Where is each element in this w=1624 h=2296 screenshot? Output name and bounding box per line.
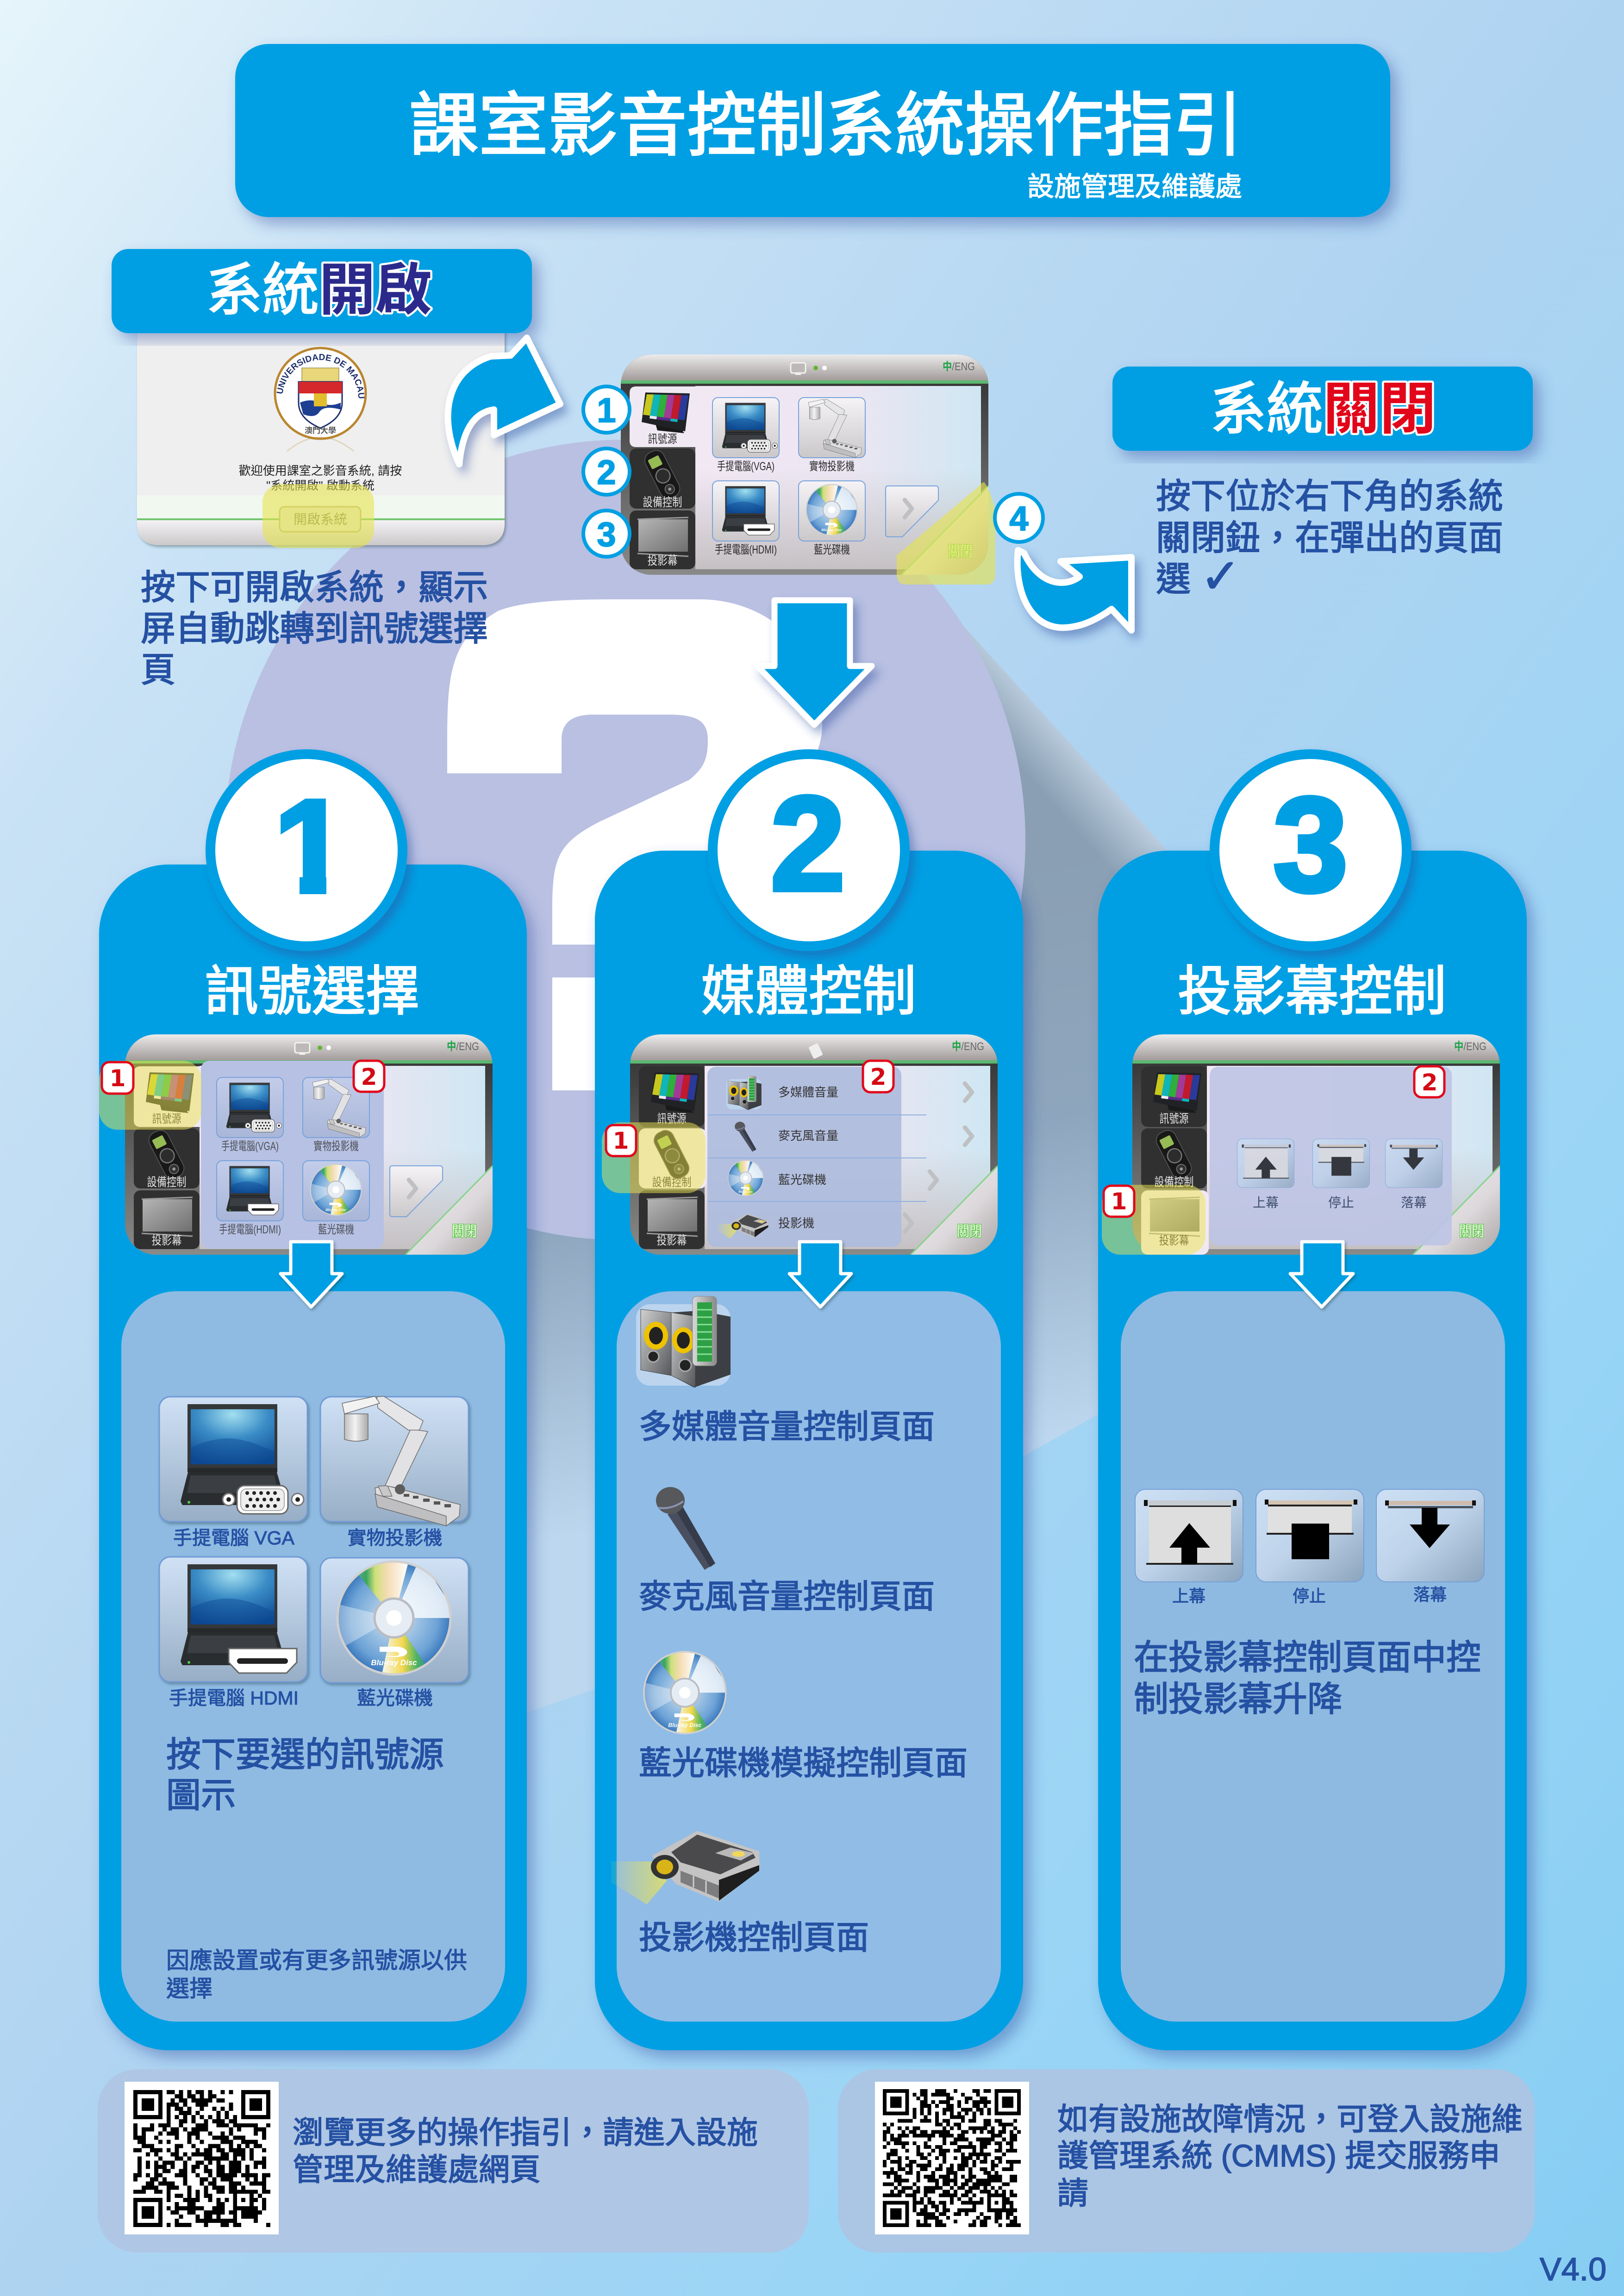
language switch: 中/ENG — [943, 361, 975, 373]
marker 2: 2 — [597, 453, 616, 492]
note text — [166, 1948, 467, 2002]
arrow down — [789, 1242, 851, 1307]
text: system off instructions: 選 — [1156, 560, 1191, 598]
screen: media control: 設備控制 — [652, 1176, 692, 1189]
instruction text — [1134, 1638, 1481, 1718]
control: screen down — [1376, 1489, 1484, 1604]
welcome text: "系統開啟" 啟動系統 — [266, 479, 375, 492]
screen: projection screen control: 落幕 — [1401, 1195, 1427, 1210]
QR code — [875, 2082, 1029, 2234]
screen: projection screen control — [1102, 1034, 1500, 1255]
badge 1 — [102, 1062, 133, 1094]
inner panel — [1121, 1291, 1505, 2022]
screen: signal selection: 手提電腦(VGA) — [221, 1140, 279, 1153]
instruction text: 制投影幕升降 — [1134, 1680, 1342, 1718]
welcome text: 歡迎使用課室之影音系統, 請按 — [239, 464, 402, 478]
version label: V4.0 — [1540, 2251, 1606, 2287]
source tile: HDMI laptop — [712, 481, 779, 556]
screen: projection screen control: 投影幕 — [1159, 1234, 1189, 1247]
source tile: HDMI laptop — [159, 1557, 307, 1709]
item: projector control — [611, 1831, 869, 1956]
icon: university crest — [275, 348, 366, 451]
badge 2: 2 — [361, 1064, 377, 1090]
close button label: 關閉 — [948, 543, 973, 560]
item: blu-ray control: 藍光碟機模擬控制頁面 — [639, 1745, 968, 1782]
long shadow behind the circle — [417, 622, 1389, 1712]
text: system on instructions: 屏自動跳轉到訊號選擇 — [141, 609, 488, 648]
source tile: VGA laptop — [159, 1397, 307, 1549]
big circle — [225, 440, 1025, 1240]
heading: 媒體控制 — [701, 961, 916, 1021]
screen: projection screen control: 關閉 — [1459, 1223, 1484, 1239]
badge 2 — [1414, 1066, 1444, 1097]
icon: university crest: UNIVERSIDADE DE MACAU — [275, 353, 366, 399]
active tab: signal source: 訊號源 — [648, 433, 677, 446]
panel 2: media control — [595, 749, 1023, 2050]
source tile: blu-ray — [799, 481, 865, 556]
source tile: VGA laptop — [712, 398, 779, 473]
QR description: 如有設施故障情況，可登入設施維 — [1057, 2102, 1523, 2137]
text: system on instructions: 頁 — [141, 650, 175, 689]
source tile: document camera — [320, 1396, 468, 1549]
badge 1: 1 — [613, 1127, 629, 1154]
title banner — [235, 44, 1390, 217]
badge 1 — [1104, 1186, 1134, 1217]
screen: projection screen control: 停止 — [1328, 1195, 1354, 1210]
active tab: signal source — [630, 386, 697, 447]
badge 2 — [354, 1061, 384, 1092]
inner panel — [617, 1291, 1001, 2022]
badge 1 — [606, 1125, 636, 1156]
source tile: HDMI laptop: 手提電腦 HDMI — [169, 1687, 299, 1709]
next page button — [886, 486, 938, 537]
welcome text — [239, 464, 402, 492]
screen: media control: 藍光碟機 — [778, 1173, 826, 1187]
screen: signal selection — [99, 1034, 493, 1255]
control: screen stop: 停止 — [1293, 1587, 1326, 1605]
item: projector control: 投影機控制頁面 — [639, 1920, 869, 1956]
item: multimedia volume: 多媒體音量控制頁面 — [639, 1409, 935, 1445]
screen: media control: 投影幕 — [656, 1233, 687, 1247]
source tile: blu-ray — [320, 1558, 468, 1709]
panel 1: signal selection — [99, 749, 527, 2050]
source tile: VGA laptop: 手提電腦 VGA — [173, 1527, 295, 1549]
step number 2: 2 — [770, 769, 845, 919]
source tile: blu-ray: 藍光碟機 — [357, 1687, 433, 1709]
item: multimedia volume — [636, 1296, 935, 1445]
badge 2: 2 — [870, 1064, 886, 1090]
step number 2 — [708, 749, 910, 951]
badge 1: 1 — [110, 1065, 125, 1092]
QR description: 瀏覽更多的操作指引，請進入設施 — [293, 2116, 758, 2150]
QR code — [125, 2082, 279, 2234]
tab: device control: 設備控制 — [643, 495, 682, 509]
icon: monitor and page dots — [791, 363, 827, 375]
instruction text: 圖示 — [166, 1776, 236, 1815]
heading: system on: 系統開啟 — [206, 259, 432, 322]
screen: signal selection: 藍光碟機 — [318, 1223, 354, 1236]
QR description: 管理及維護處網頁 — [293, 2153, 541, 2187]
QR description — [293, 2116, 758, 2187]
screen: media control: 訊號源 — [657, 1112, 686, 1126]
inner panel — [121, 1291, 505, 2022]
control: screen stop — [1256, 1489, 1364, 1605]
instruction text: 按下要選的訊號源 — [166, 1735, 444, 1774]
panel: CMMS QR — [838, 2069, 1535, 2252]
icon: university crest: 澳門大學 — [305, 426, 336, 435]
text: system off instructions: 按下位於右下角的系統 — [1156, 477, 1503, 516]
step number 1 — [206, 749, 407, 951]
start button with highlight — [262, 484, 374, 548]
arrow down — [281, 1242, 342, 1307]
screen: projection screen control: 上幕 — [1253, 1195, 1279, 1210]
screen: signal selection: 設備控制 — [147, 1175, 186, 1189]
marker 1: 1 — [597, 391, 616, 429]
control: screen up — [1135, 1489, 1243, 1605]
marker 2 — [583, 448, 630, 495]
tab: device control — [642, 448, 683, 509]
arrow down — [1290, 1242, 1353, 1307]
control: screen up: 上幕 — [1172, 1587, 1206, 1605]
highlight: close corner — [897, 482, 995, 585]
marker 4 — [995, 494, 1043, 542]
instruction text: 在投影幕控制頁面中控 — [1134, 1638, 1481, 1677]
badge 2 — [863, 1061, 893, 1092]
note text: 因應設置或有更多訊號源以供 — [166, 1948, 467, 1973]
step number 3: 3 — [1273, 770, 1348, 920]
item: blu-ray control — [639, 1649, 968, 1782]
control: screen down: 落幕 — [1413, 1585, 1447, 1604]
step markers on main screen — [583, 386, 1043, 557]
source tile: document camera: 實物投影機 — [347, 1527, 443, 1549]
marker 3 — [583, 510, 630, 557]
screen: media control: 麥克風音量 — [778, 1129, 838, 1143]
source tile: blu-ray: 藍光碟機 — [814, 543, 850, 556]
main title: 課室影音控制系統操作指引 — [409, 87, 1243, 164]
heading: system off: 系統關閉 — [1210, 378, 1436, 441]
panel: system start screen — [137, 324, 505, 548]
screen: signal selection: 關閉 — [452, 1223, 477, 1239]
panel: more guides QR — [98, 2069, 809, 2252]
heading: system on — [112, 249, 532, 333]
marker 1 — [583, 386, 630, 433]
arrow: curved from close button — [1018, 550, 1131, 630]
text: system on instructions — [141, 568, 488, 689]
item: microphone volume — [639, 1487, 935, 1615]
marker 3: 3 — [597, 515, 616, 554]
screen: signal selection: 中/ENG — [447, 1040, 479, 1053]
tab: projection screen — [637, 517, 688, 567]
QR description — [1057, 2102, 1523, 2211]
heading: system off — [1112, 367, 1533, 451]
big question mark — [447, 599, 822, 1090]
item: microphone volume: 麥克風音量控制頁面 — [639, 1579, 935, 1615]
text: system off instructions: ✓ — [1200, 548, 1241, 604]
source tile: VGA laptop: 手提電腦(VGA) — [717, 460, 775, 473]
screen: signal selection: 手提電腦(HDMI) — [219, 1223, 281, 1236]
text: system off instructions — [1156, 477, 1503, 604]
source tile: document camera — [799, 398, 865, 473]
QR description: 請 — [1057, 2176, 1088, 2211]
text: system off instructions: 關閉鈕，在彈出的頁面 — [1156, 518, 1503, 557]
badge 2: 2 — [1422, 1069, 1437, 1096]
screen: media control: 中/ENG — [952, 1040, 984, 1053]
screen: media control — [602, 1034, 998, 1255]
department name: 設施管理及維護處 — [1027, 172, 1242, 202]
marker 4: 4 — [1009, 499, 1029, 538]
instruction text — [166, 1735, 444, 1815]
screen: signal selection: 訊號源 — [152, 1113, 181, 1126]
source tile: HDMI laptop: 手提電腦(HDMI) — [715, 543, 777, 556]
screen: media control: 多媒體音量 — [778, 1085, 838, 1099]
source tile: document camera: 實物投影機 — [809, 460, 855, 473]
note text: 選擇 — [166, 1976, 212, 2002]
screen: projection screen control: 設備控制 — [1155, 1175, 1193, 1189]
screen: media control: 關閉 — [957, 1223, 982, 1239]
screen: projection screen control: 訊號源 — [1159, 1112, 1189, 1126]
heading: 投影幕控制 — [1178, 961, 1446, 1021]
tab: projection screen: 投影幕 — [647, 554, 678, 567]
step number 1: 1 — [274, 772, 349, 922]
QR description: 護管理系統 (CMMS) 提交服務申 — [1057, 2139, 1500, 2173]
badge 1: 1 — [1111, 1188, 1127, 1215]
screen: signal selection: 投影幕 — [152, 1233, 181, 1247]
arrow: big down arrow — [757, 600, 872, 725]
screen: signal selection: 實物投影機 — [313, 1140, 359, 1153]
arrow: curved from start to source page — [448, 338, 560, 464]
screen: media control: 投影機 — [778, 1216, 814, 1230]
step number 3 — [1210, 749, 1412, 951]
heading: 訊號選擇 — [205, 961, 419, 1021]
panel 3: projection screen control — [1098, 749, 1527, 2050]
text: system on instructions: 按下可開啟系統，顯示 — [141, 568, 488, 607]
start button with highlight: 開啟系統 — [294, 512, 347, 527]
screen: projection screen control: 中/ENG — [1454, 1040, 1487, 1053]
panel: main touch screen — [621, 355, 988, 575]
